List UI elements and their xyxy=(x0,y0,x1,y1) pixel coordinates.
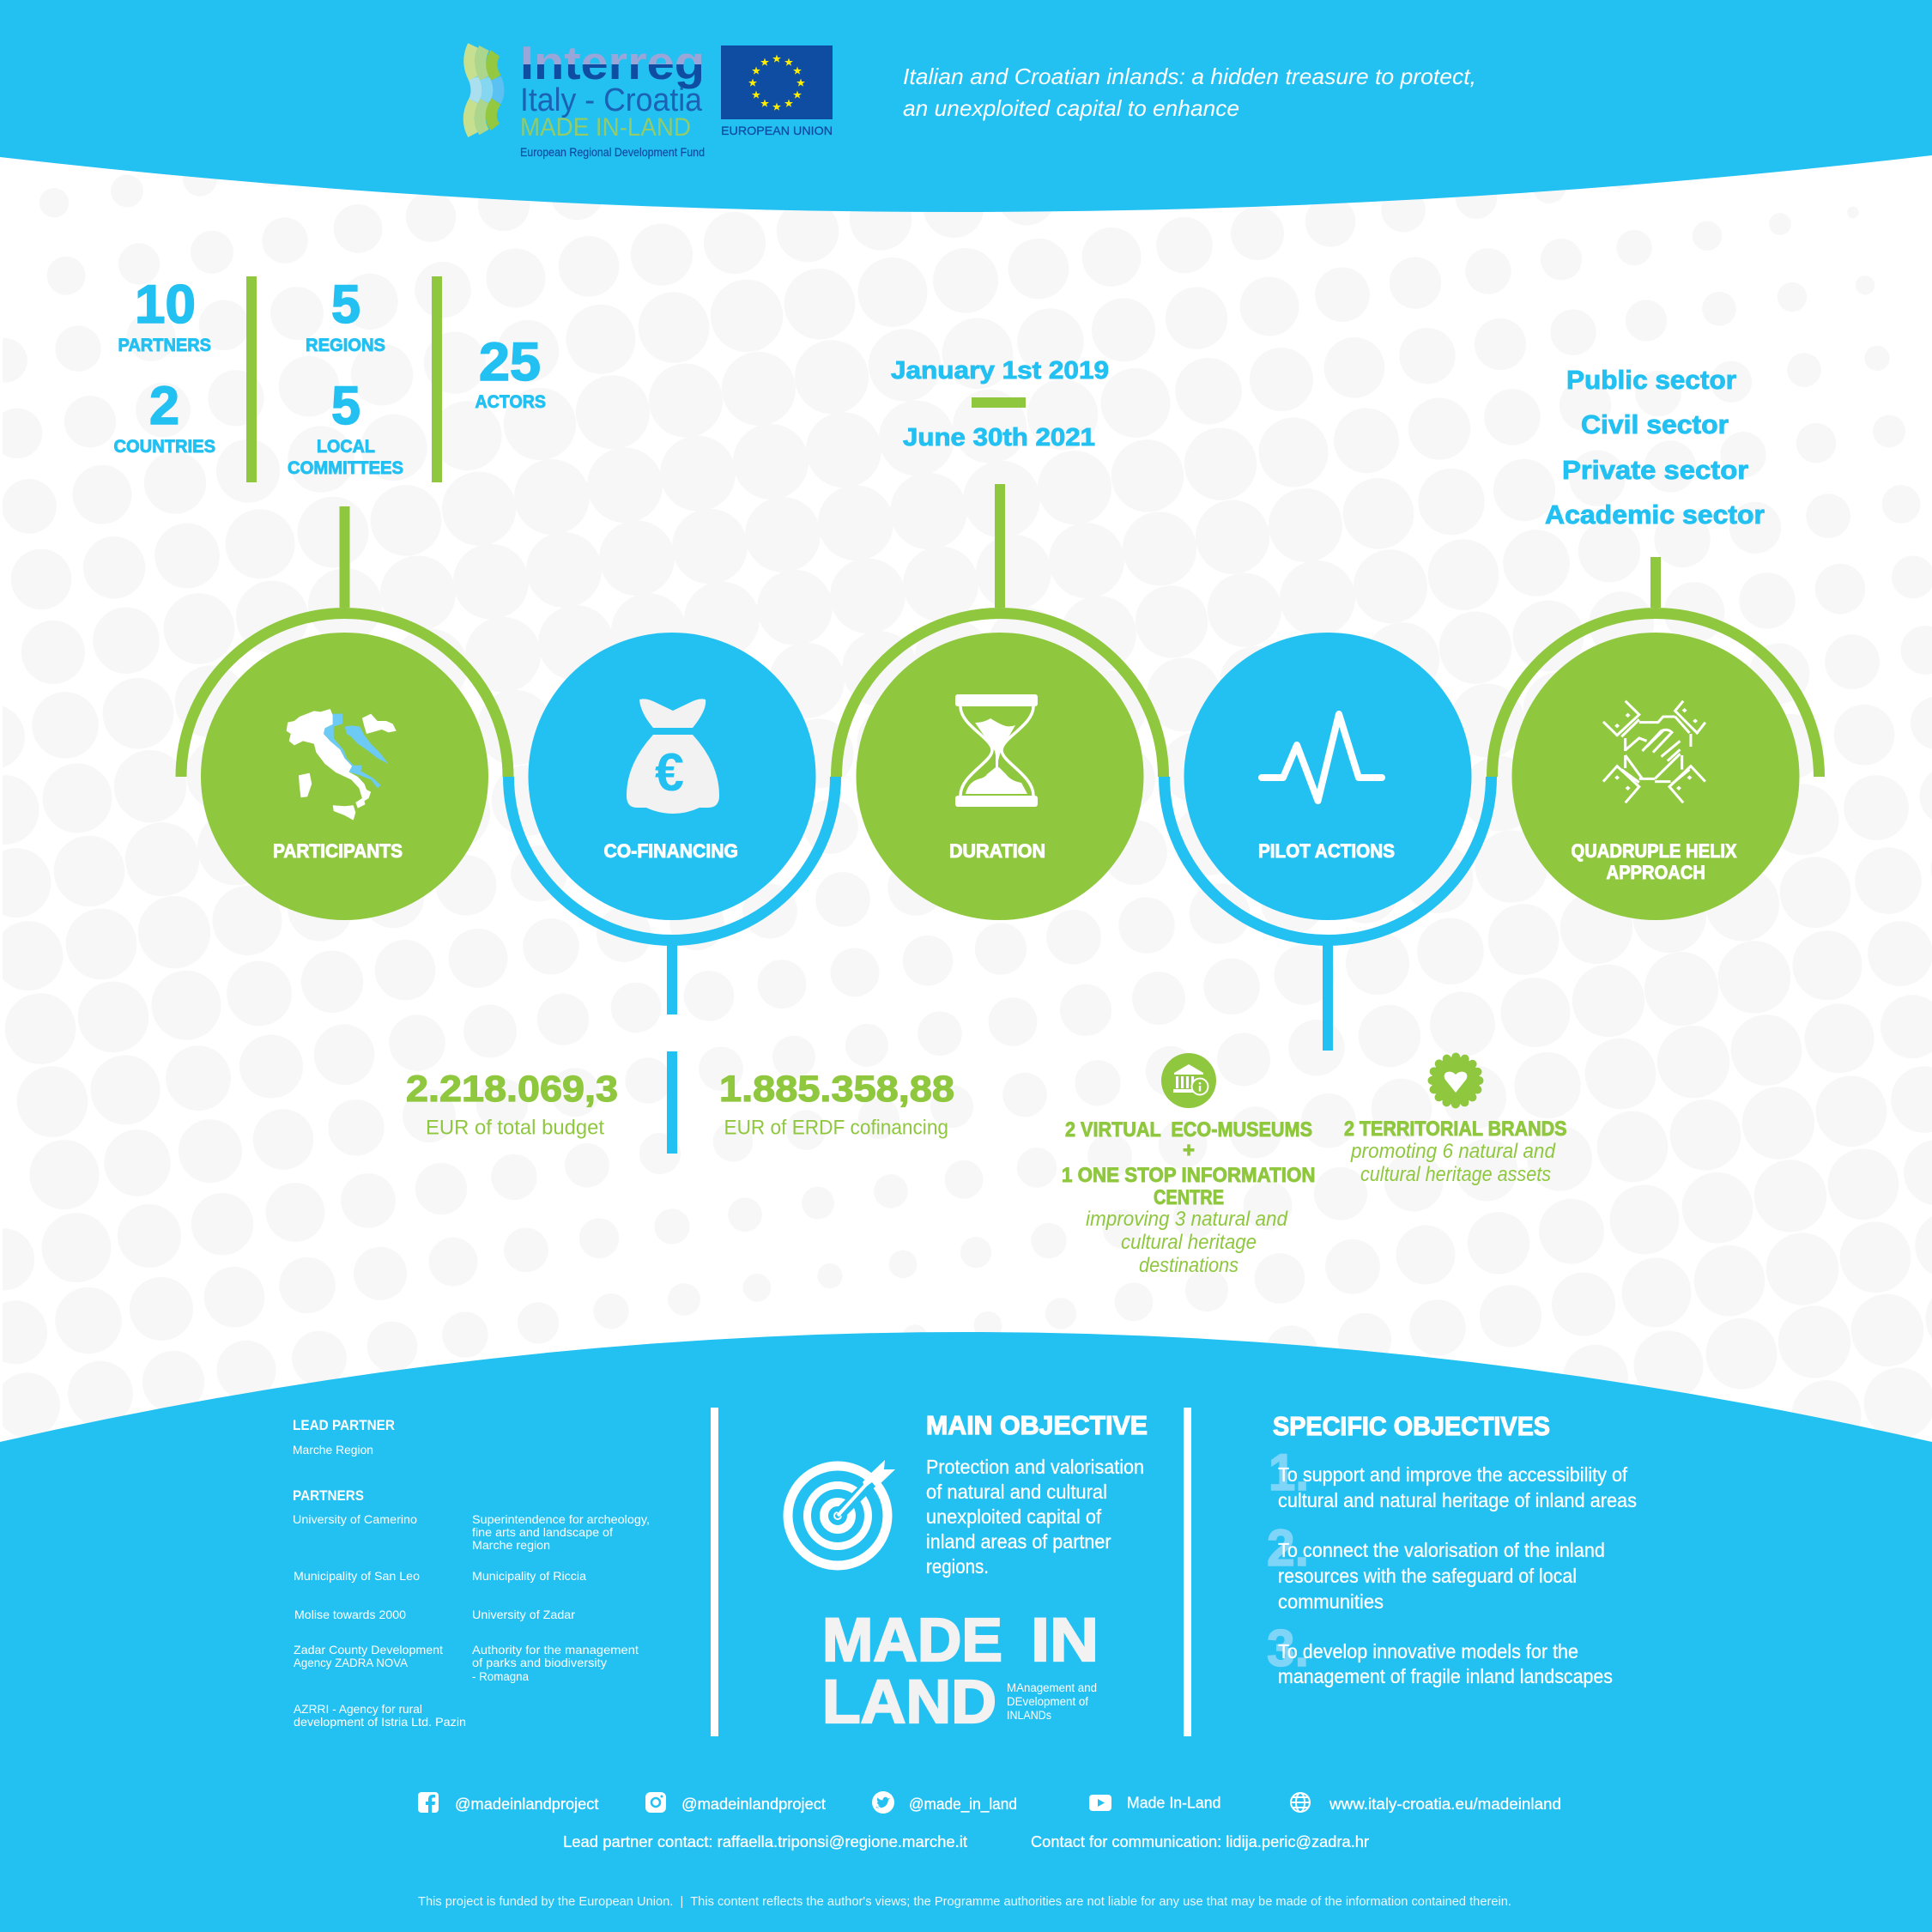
divider bar right xyxy=(432,276,442,482)
text block: 2 TERRITORIAL BRANDS xyxy=(1344,1117,1567,1141)
total budget: EUR of total budget xyxy=(426,1116,604,1140)
panel: duration xyxy=(857,633,1143,920)
panel: specific objectives xyxy=(1267,1411,1637,1687)
text block: CENTRE xyxy=(1154,1186,1224,1209)
label: PILOT ACTIONS xyxy=(1258,840,1395,862)
text block xyxy=(1062,1118,1315,1277)
participants statistics xyxy=(113,275,546,478)
pilot action: eco-museums xyxy=(1062,1053,1315,1277)
website: www.italy-croatia.eu/madeinland xyxy=(1329,1796,1561,1813)
logo: European Union flag xyxy=(721,45,833,137)
icon: map of Italy and Croatia xyxy=(287,709,397,821)
partner list: Municipality of Riccia xyxy=(472,1569,586,1583)
objective 1 xyxy=(1278,1463,1637,1511)
heading lead partner: LEAD PARTNER xyxy=(293,1417,395,1433)
contact lines: Lead partner contact: raffaella.triponsi@regione.marche.it xyxy=(563,1833,967,1850)
twitter xyxy=(872,1791,1017,1814)
quadruple helix sectors: Private sector xyxy=(1562,455,1748,485)
objective numbers: 2. xyxy=(1267,1519,1309,1577)
budget figures xyxy=(406,1051,954,1154)
text block: cultural heritage xyxy=(1121,1231,1257,1254)
partner list: Marche region xyxy=(472,1538,550,1552)
panel: main objective xyxy=(788,1410,1148,1578)
partner list: Zadar County Development xyxy=(294,1643,443,1656)
acronym explanation: MAnagement and xyxy=(1007,1681,1097,1694)
quadruple helix sectors xyxy=(1545,365,1765,530)
label: DURATION xyxy=(949,840,1045,862)
heading partners: PARTNERS xyxy=(293,1487,364,1504)
stat 5 local committees: COMMITTEES xyxy=(288,457,403,478)
stat 2 countries: 2 xyxy=(149,376,179,436)
logo: Interreg Italy-Croatia MADE IN-LAND xyxy=(469,36,705,159)
total budget xyxy=(406,1069,618,1140)
partner list: Agency ZADRA NOVA xyxy=(294,1656,409,1669)
icon: target with arrow xyxy=(788,1460,895,1566)
white vertical divider left xyxy=(711,1408,718,1736)
objective 2: resources with the safeguard of local xyxy=(1278,1565,1577,1587)
circle xyxy=(1512,633,1799,920)
label: APPROACH xyxy=(1607,862,1705,883)
MADE IN LAND wordmark: LAND xyxy=(822,1669,996,1736)
objective 3: To develop innovative models for the xyxy=(1278,1640,1578,1662)
stat 10 partners: 10 xyxy=(135,275,196,335)
bottom band xyxy=(0,1332,1932,1932)
objective numbers xyxy=(1267,1444,1309,1677)
label xyxy=(1571,840,1737,883)
stat 5 local committees: 5 xyxy=(331,376,360,436)
stat 25 actors xyxy=(475,332,546,412)
pilot action: territorial brands xyxy=(1344,1057,1567,1186)
contact lines xyxy=(563,1833,1369,1850)
arcs around circles xyxy=(181,613,1820,941)
stat 5 regions: 5 xyxy=(331,275,360,335)
partner list: AZRRI - Agency for rural xyxy=(294,1702,422,1716)
logo line Italy - Croatia: Italy - Croatia xyxy=(520,82,703,118)
stat 5 local committees xyxy=(288,376,403,478)
social links row xyxy=(418,1791,1561,1814)
acronym explanation: DEvelopment of xyxy=(1007,1694,1088,1708)
logo line European Regional Development Fund: European Regional Development Fund xyxy=(520,145,705,159)
MADE IN LAND wordmark: IN xyxy=(1031,1607,1099,1675)
objective 2: To connect the valorisation of the inland xyxy=(1278,1539,1605,1561)
total budget: 2.218.069,3 xyxy=(406,1069,618,1110)
stat 25 actors: 25 xyxy=(479,332,541,392)
partner list: development of Istria Ltd. Pazin xyxy=(294,1715,466,1729)
youtube: Made In-Land xyxy=(1127,1794,1220,1811)
header tagline xyxy=(903,64,1476,121)
icon: four joined hands xyxy=(1603,701,1705,802)
icon: Interreg waves xyxy=(469,45,499,135)
facebook xyxy=(418,1792,599,1813)
partner list: Municipality of San Leo xyxy=(294,1569,420,1583)
ERDF cofinancing: 1.885.358,88 xyxy=(719,1069,954,1110)
icon: pulse line xyxy=(1262,714,1382,801)
text block: cultural heritage assets xyxy=(1360,1163,1551,1186)
facebook: @madeinlandproject xyxy=(455,1796,599,1813)
partner list: fine arts and landscape of xyxy=(472,1525,613,1539)
flag rectangle xyxy=(721,45,833,119)
partner list: University of Camerino xyxy=(293,1512,417,1526)
logo line MADE IN-LAND: MADE IN-LAND xyxy=(520,113,691,142)
heading: SPECIFIC OBJECTIVES xyxy=(1273,1411,1550,1441)
logo wordmark Interreg: Interreg xyxy=(520,36,705,89)
duration dates: January 1st 2019 xyxy=(891,357,1109,385)
ERDF cofinancing: EUR of ERDF cofinancing xyxy=(724,1116,948,1140)
acronym explanation xyxy=(1007,1681,1097,1722)
objective 2 xyxy=(1278,1539,1605,1613)
partner list: of parks and biodiversity xyxy=(472,1656,607,1669)
paragraph xyxy=(926,1456,1144,1578)
paragraph: unexploited capital of xyxy=(926,1505,1102,1528)
text block: 1 ONE STOP INFORMATION xyxy=(1062,1164,1315,1187)
objective 1: cultural and natural heritage of inland areas xyxy=(1278,1489,1637,1511)
panel: pilot actions xyxy=(1184,633,1471,920)
panel: quadruple helix approach xyxy=(1512,633,1799,920)
circle xyxy=(201,633,488,920)
budget divider xyxy=(667,1051,677,1154)
panel: participants xyxy=(201,633,488,920)
lead partner name: Marche Region xyxy=(293,1443,373,1457)
header tagline: Italian and Croatian inlands: a hidden treasure to protect, xyxy=(903,64,1476,89)
text block: + xyxy=(1183,1139,1195,1162)
quadruple helix sectors: Public sector xyxy=(1566,365,1736,395)
instagram: @madeinlandproject xyxy=(681,1796,826,1813)
icon: money bag with euro sign xyxy=(627,699,719,814)
quadruple helix sectors: Academic sector xyxy=(1545,500,1765,530)
heading: MAIN OBJECTIVE xyxy=(926,1410,1148,1440)
partner list: Superintendence for archeology, xyxy=(472,1512,650,1526)
stat 25 actors: ACTORS xyxy=(475,391,546,412)
text block: improving 3 natural and xyxy=(1086,1208,1288,1231)
objective numbers: 3. xyxy=(1267,1620,1309,1677)
icon: museum with info mark xyxy=(1161,1053,1216,1108)
top header band xyxy=(0,0,1932,212)
text block xyxy=(1344,1117,1567,1186)
circle xyxy=(857,633,1143,920)
objective 1: To support and improve the accessibility of xyxy=(1278,1463,1628,1486)
paragraph: Protection and valorisation xyxy=(926,1456,1144,1478)
objective 2: communities xyxy=(1278,1590,1384,1613)
label: CO-FINANCING xyxy=(604,840,738,862)
icon: money bag with euro sign: € xyxy=(655,743,684,802)
partner list: - Romagna xyxy=(472,1669,529,1683)
contact lines: Contact for communication: lidija.peric@zadra.hr xyxy=(1031,1833,1369,1850)
stat 5 regions xyxy=(306,275,385,355)
label: PARTICIPANTS xyxy=(273,840,403,862)
instagram xyxy=(645,1792,826,1813)
text block: promoting 6 natural and xyxy=(1350,1140,1556,1163)
stat 5 regions: REGIONS xyxy=(306,335,385,355)
label: QUADRUPLE HELIX xyxy=(1571,840,1737,862)
disclaimer: This project is funded by the European Union. | This content reflects the author's views; the Programme authorities are not liable for any use that may be made of the information contained therein. xyxy=(418,1895,1511,1909)
circle xyxy=(1184,633,1471,920)
duration dates xyxy=(891,357,1109,451)
duration dates: June 30th 2021 xyxy=(903,424,1095,451)
stat 2 countries: COUNTRIES xyxy=(113,436,215,457)
quadruple helix sectors: Civil sector xyxy=(1581,409,1729,439)
objective numbers: 1. xyxy=(1269,1444,1309,1501)
partner list: Authority for the management xyxy=(472,1643,639,1656)
twitter: @made_in_land xyxy=(909,1796,1017,1814)
paragraph: inland areas of partner xyxy=(926,1530,1111,1553)
divider bar left xyxy=(246,276,257,482)
label EUROPEAN UNION: EUROPEAN UNION xyxy=(721,124,833,137)
MADE IN LAND wordmark xyxy=(822,1607,1099,1736)
icon: heart badge xyxy=(1432,1057,1480,1105)
stat 2 countries xyxy=(113,376,215,457)
white vertical divider right xyxy=(1184,1408,1191,1736)
paragraph: regions. xyxy=(926,1555,989,1578)
objective 3 xyxy=(1278,1640,1613,1687)
acronym explanation: INLANDs xyxy=(1007,1708,1051,1722)
circle xyxy=(529,633,815,920)
panel: co-financing xyxy=(529,633,815,920)
ERDF cofinancing xyxy=(719,1069,954,1140)
paragraph: of natural and cultural xyxy=(926,1481,1107,1503)
icon: hourglass xyxy=(955,694,1038,807)
text block: destinations xyxy=(1139,1254,1239,1277)
flag stars xyxy=(748,55,805,111)
text block: 2 VIRTUAL ECO-MUSEUMS xyxy=(1065,1118,1312,1142)
stat 5 local committees: LOCAL xyxy=(317,436,375,457)
stat 10 partners: PARTNERS xyxy=(118,335,211,355)
connector stems xyxy=(340,484,1661,1051)
partner list: Molise towards 2000 xyxy=(294,1608,406,1621)
MADE IN LAND wordmark: MADE xyxy=(822,1607,1002,1675)
partner list: University of Zadar xyxy=(472,1608,575,1621)
partner list xyxy=(293,1512,650,1729)
panel: lead partner and partners xyxy=(293,1417,650,1729)
objective 3: management of fragile inland landscapes xyxy=(1278,1665,1613,1687)
header tagline: an unexploited capital to enhance xyxy=(903,95,1239,121)
stat 10 partners xyxy=(118,275,211,355)
